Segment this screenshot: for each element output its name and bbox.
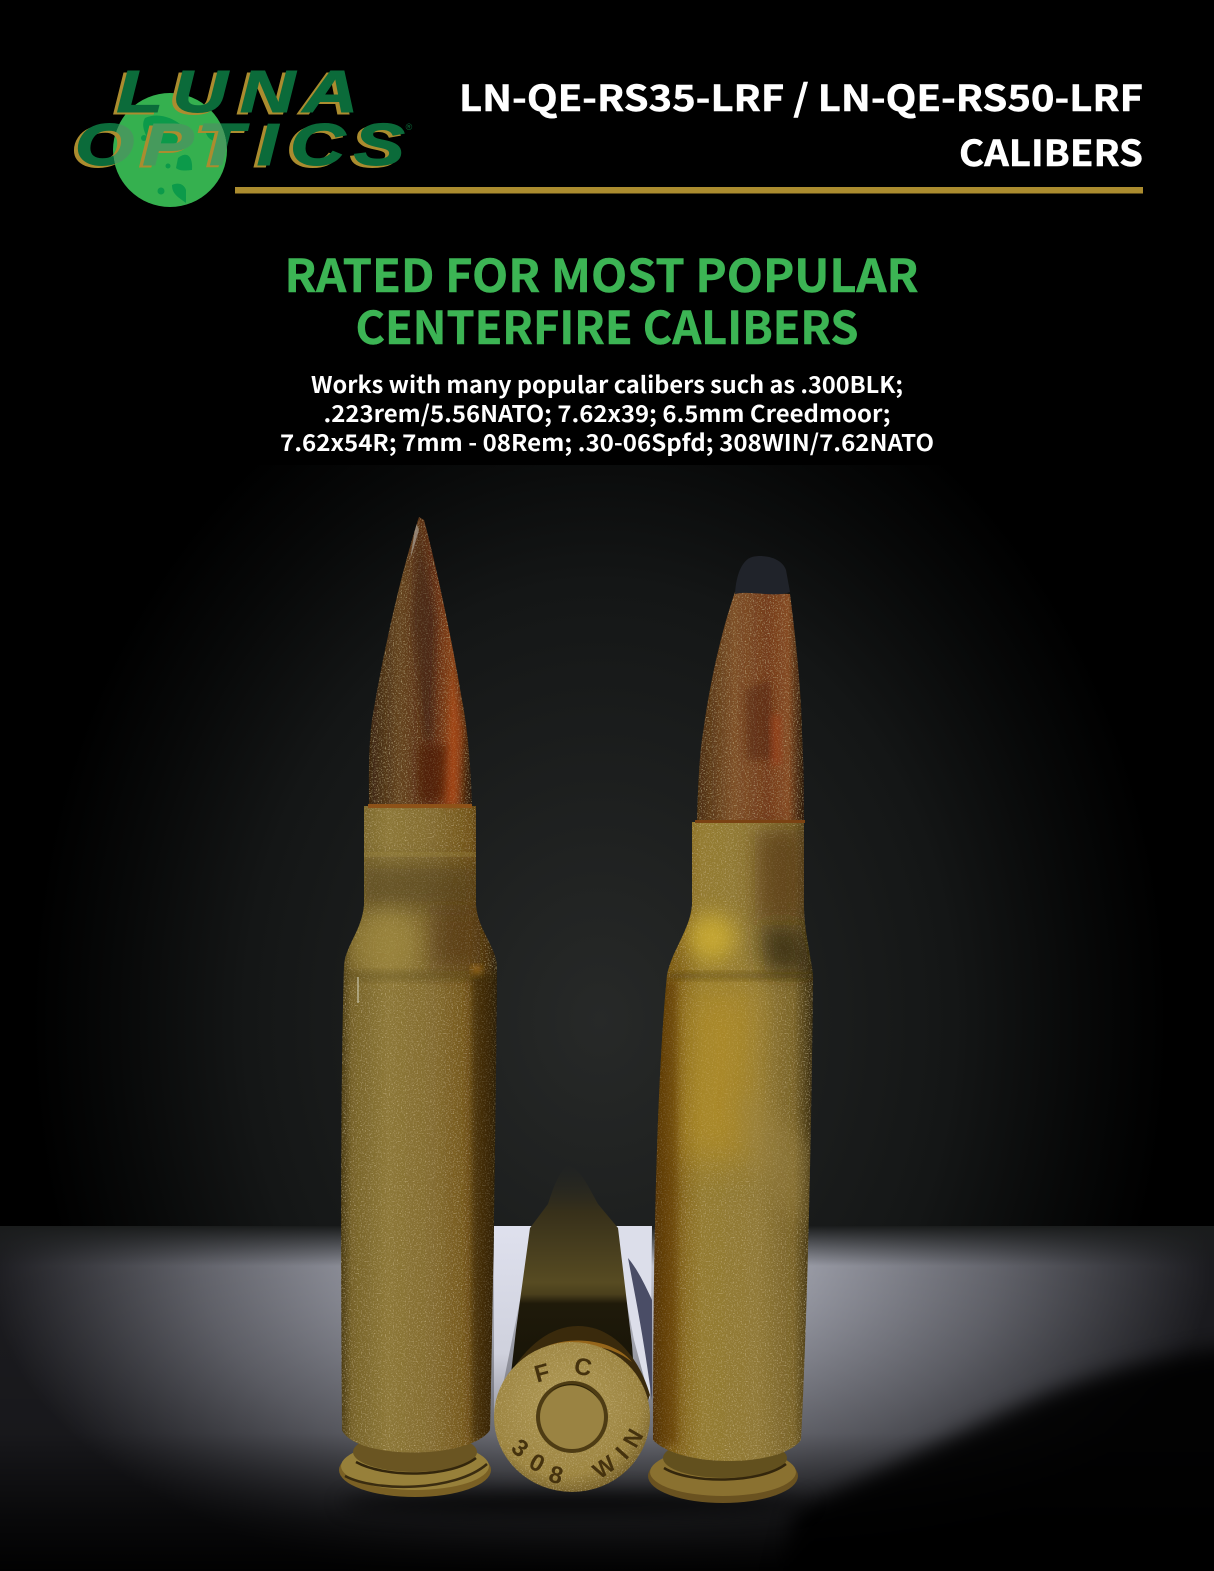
headstamp: WIN: W [588,1450,621,1484]
bright floor gap between cartridges [494,1226,535,1420]
case head disc [494,1342,650,1492]
copper bullet left [369,517,472,806]
header title: LN-QE-RS35-LRF / LN-QE-RS50-LRF [459,70,1143,122]
header title [459,70,1143,177]
center rim [497,1326,650,1420]
caliber description: .223rem/5.56NATO; 7.62x39; 6.5mm Creedmoor; [324,395,891,429]
primer [536,1381,608,1453]
caliber description [280,366,934,458]
blue shadow gap [612,1226,652,1400]
crimp line right [695,820,805,823]
registered mark: ® [406,122,413,132]
center case [508,1165,636,1400]
headstamp: F C: C [572,1353,594,1382]
headstamp: WIN: I [610,1442,634,1464]
crimp line left [368,804,472,808]
headstamp: WIN: N [618,1424,648,1452]
headstamp: 308: 0 [525,1448,549,1478]
brass body left [341,806,497,1452]
photo backdrop glow [0,465,1214,1245]
heading: rated for most popular centerfire calibers: CENTERFIRE CALIBERS [356,292,858,357]
headstamp: 308 [506,1434,566,1490]
heading: rated for most popular centerfire calibers [284,240,918,357]
headstamp: 308: 8 [546,1461,566,1490]
logo word: LUNA: LUNA [116,59,358,125]
logo word: OPTICS: OPTICS [75,112,405,178]
caliber description: 7.62x54R; 7mm - 08Rem; .30-06Spfd; 308WIN/7.62NATO [280,424,934,458]
headstamp: F C: F [532,1359,553,1388]
logo word: LUNA: LUNA [112,61,354,127]
header title: CALIBERS [959,125,1143,177]
rim left [339,1432,491,1497]
gold divider rule [235,187,1143,194]
caliber description: Works with many popular calibers such as .300BLK; [311,366,903,400]
rim right [648,1438,798,1503]
cartridge: right [648,556,813,1503]
copper bullet right [697,592,804,822]
cartridge: center, base toward viewer [494,1165,650,1492]
cartridge: left [339,517,498,1497]
photo: three cartridges on a lit surface [0,465,1214,1571]
brass body right [653,822,813,1461]
headstamp: WIN [588,1424,648,1484]
logo word: OPTICS: OPTICS [71,114,401,180]
lit floor [0,1226,1214,1571]
contact shadow [340,1491,810,1515]
headstamp: 308: 3 [506,1434,533,1463]
logo globe [113,93,227,207]
heading: rated for most popular centerfire calibers: RATED FOR MOST POPULAR [284,240,918,305]
lead tip [735,556,790,594]
logo: Luna Optics [71,59,413,207]
floor shadow on right [770,1345,1214,1571]
headstamp: F C [532,1353,594,1388]
